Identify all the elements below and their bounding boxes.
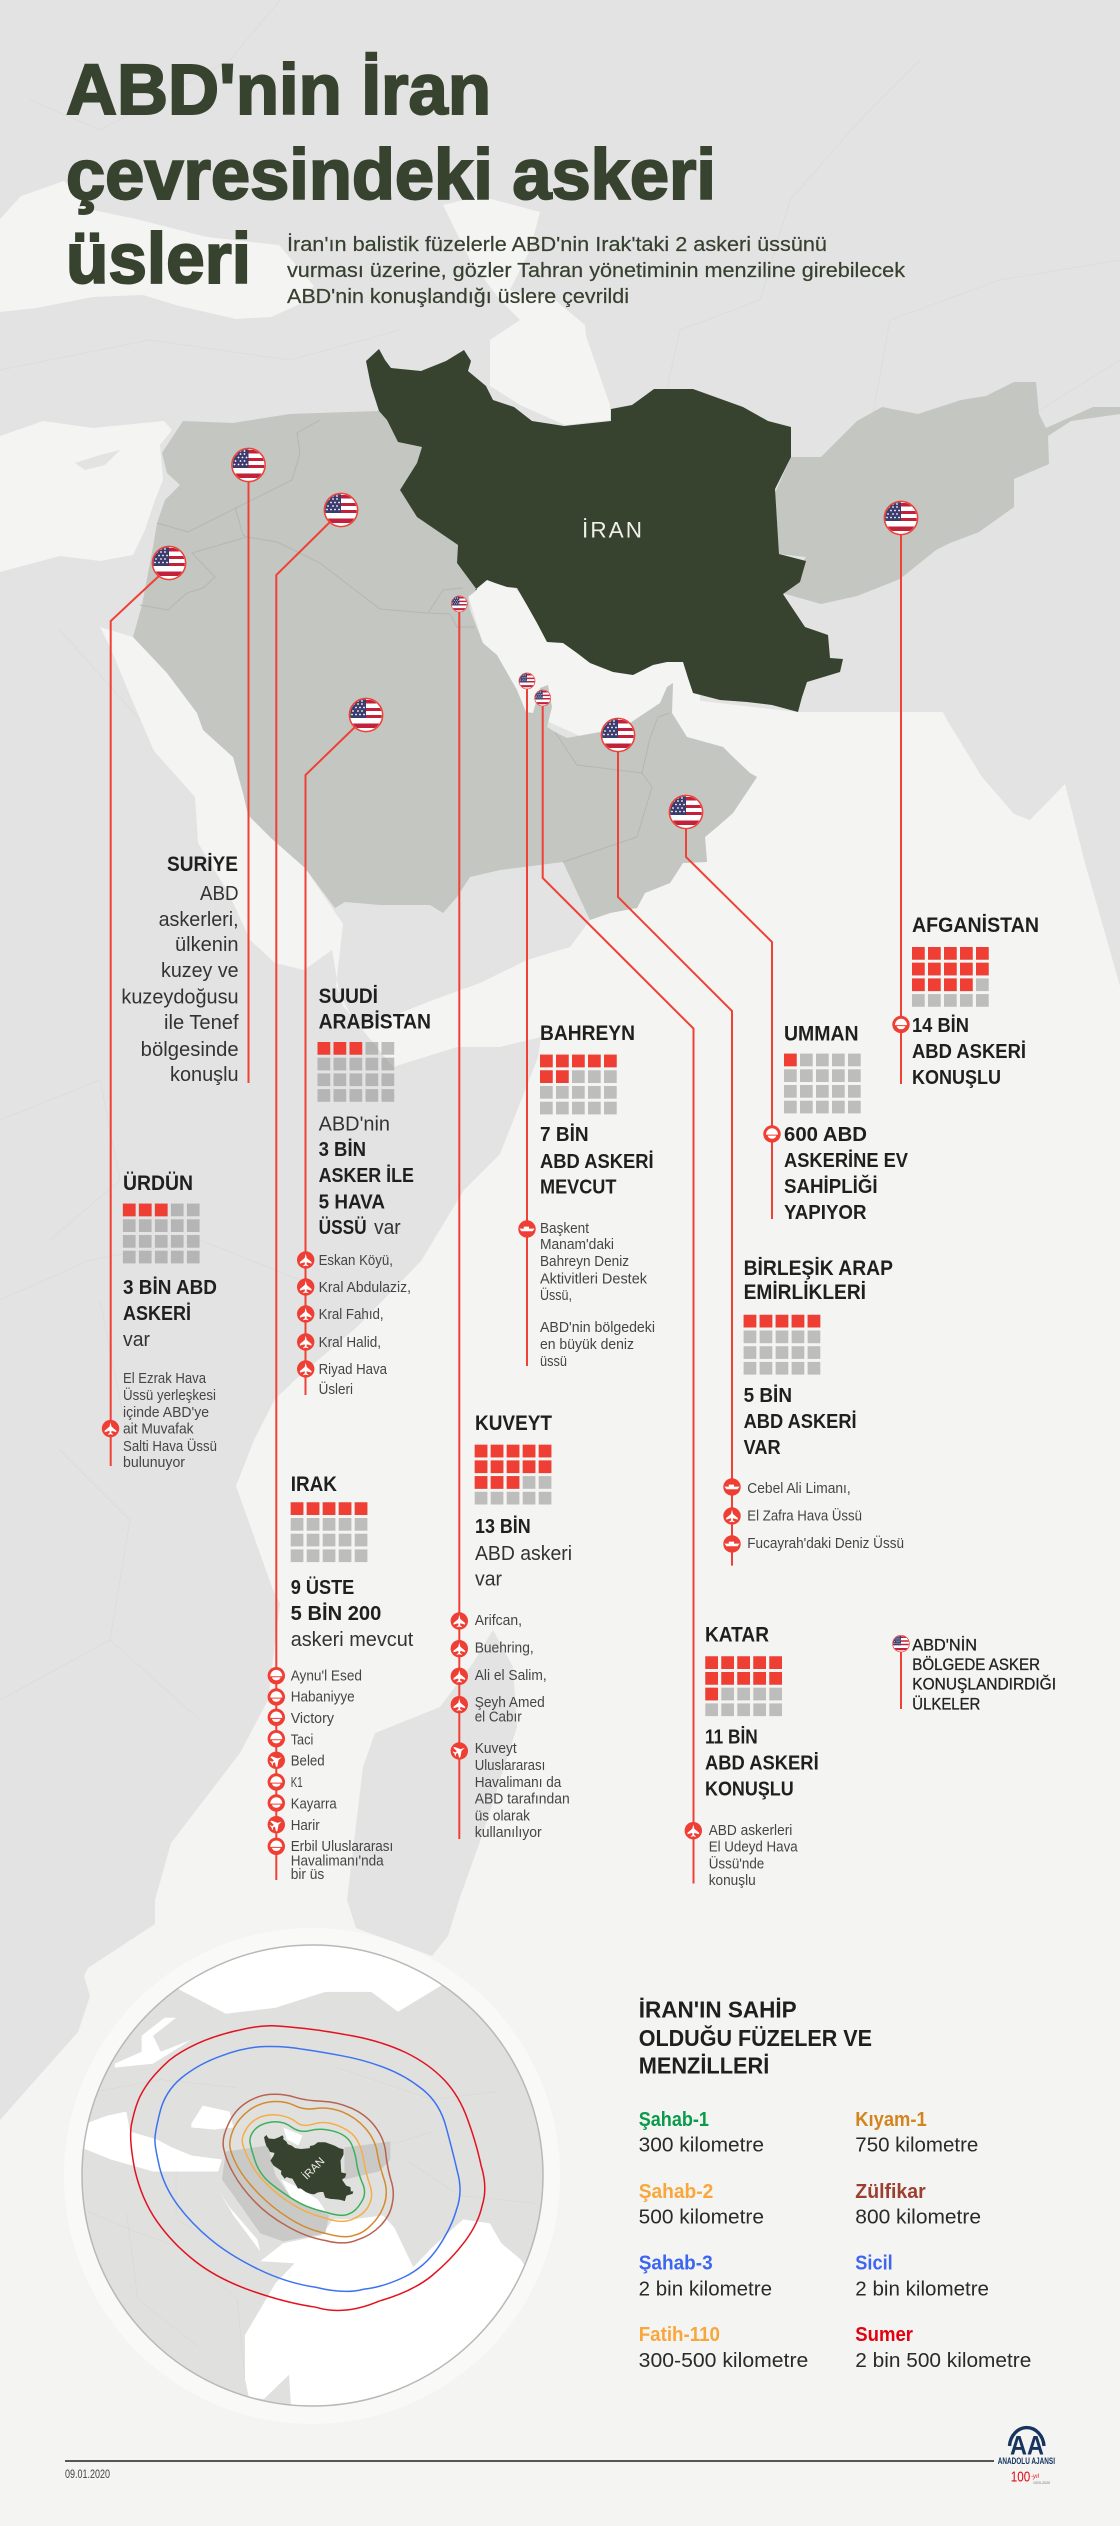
panel: Irak: 5 BİN 200 [291,1602,381,1625]
panel: Bahreyn: 7 BİN [540,1123,589,1146]
panel: Ürdün: El Ezrak Hava [123,1371,207,1387]
panel: Birleşik Arap Emirlikleri: Cebel Ali Limanı, [747,1481,851,1497]
panel: missiles and ranges: 2 bin kilometre [639,2278,772,2300]
globe: missile ranges [81,1942,544,2407]
panel: Birleşik Arap Emirlikleri: EMİRLİKLERİ [744,1281,866,1304]
panel: Suudi Arabistan: ÜSSÜ [319,1216,367,1239]
troop grid: Ürdün [123,1204,200,1263]
panel: missiles and ranges: Sicil [855,2253,893,2275]
panel: Katar: Üssü'nde [709,1854,764,1872]
panel: Birleşik Arap Emirlikleri: Fucayrah'daki Deniz Üssü [747,1534,904,1552]
logo: Anadolu Ajansı: ANADOLU AJANSI [998,2456,1055,2467]
panel: missiles and ranges: Fatih-110 [639,2324,720,2346]
panel: Bahreyn: Aktivitleri Destek [540,1272,648,1288]
panel: Ürdün: 3 BİN ABD [123,1276,217,1299]
panel: Kuveyt: Ali el Salim, [475,1668,547,1684]
panel: Irak: K1 [291,1775,303,1791]
troop grid: BAE [744,1315,820,1375]
panel: missiles and ranges: 750 kilometre [855,2135,978,2157]
panel: Afganistan: AFGANİSTAN [912,914,1039,937]
panel: Suriye: ABD [200,883,239,905]
panel: Katar: ABD ASKERİ [705,1751,819,1774]
panel: Katar: konuşlu [709,1873,756,1889]
panel: Irak: 9 ÜSTE [291,1576,354,1599]
panel: Kuveyt: Kuveyt [475,1741,517,1757]
panel: Birleşik Arap Emirlikleri: VAR [744,1437,781,1459]
panel: Afganistan: KONUŞLU [912,1067,1001,1089]
panel: Birleşik Arap Emirlikleri: 5 BİN [744,1384,792,1407]
panel: Ürdün: var [123,1329,150,1351]
panel: Suriye: kuzey ve [161,960,239,982]
panel: Ürdün: Üssü yerleşkesi [123,1386,216,1404]
panel: Bahreyn: BAHREYN [540,1022,635,1045]
panel: Bahreyn: en büyük deniz [540,1337,634,1353]
panel: Irak: Erbil Uluslararası [291,1839,393,1855]
range: Kıyam-1 [230,2101,386,2237]
panel: Suudi Arabistan: SUUDİ [319,985,378,1008]
panel: Kuveyt: üs olarak [475,1809,531,1825]
panel: Irak: Kayarra [291,1797,338,1813]
icon: ship [518,1220,536,1238]
legend: countries hosting US troops [893,1635,1056,1713]
panel: Suudi Arabistan [297,698,431,1398]
Afghanistan [775,382,1120,604]
icon: helmet [892,1016,910,1033]
panel: Kuveyt: var [475,1569,502,1591]
panel: Suudi Arabistan: ABD'nin [319,1114,390,1136]
logo: Anadolu Ajansı: 1920-2020 [1033,2481,1050,2485]
panel: Irak: Harir [291,1818,320,1834]
troop grid: Suudi Arabistan [318,1042,394,1102]
panel: Irak [268,493,414,1883]
panel: Kuveyt: Buehring, [475,1641,534,1657]
panel: Ürdün: ait Muvafak [123,1422,194,1438]
troop grid: Bahreyn [540,1055,617,1114]
icon: helmet [763,1125,781,1143]
panel: Suudi Arabistan: var [374,1217,401,1239]
panel: Suudi Arabistan: 5 HAVA [319,1192,385,1214]
globe: missile ranges: İRAN [300,2155,327,2182]
panel: Ürdün: bulunuyor [123,1455,185,1471]
panel: Ürdün: ÜRDÜN [123,1172,193,1195]
panel: Kuveyt: ABD tarafından [475,1792,570,1808]
footer: date and rule: 09.01.2020 [65,2469,110,2481]
icon: jet [685,1822,702,1839]
panel: missiles and ranges: Kıyam-1 [855,2109,927,2131]
panel: Irak: askeri mevcut [291,1629,414,1651]
Iran map: İRAN [582,518,642,542]
panel: Suudi Arabistan: Kral Abdulaziz, [319,1280,411,1296]
panel: Irak: bir üs [291,1867,324,1883]
panel: Umman: SAHİPLİĞİ [784,1174,878,1198]
troop grid: Irak [291,1502,367,1562]
range: Şahab-2 / Fatih-110 [242,2115,372,2221]
subtitle: ABD'nin konuşlandığı üslere çevrildi [287,285,629,308]
troop grid: Kuveyt [475,1445,551,1504]
panel: Bahreyn: Bahreyn Deniz [540,1254,629,1270]
title: çevresindeki askeri [66,136,716,215]
troop grid: Afganistan [912,947,989,1007]
panel: missiles and ranges [639,1996,1031,2372]
panel: Irak: Beled [291,1754,325,1770]
panel: Katar: El Udeyd Hava [709,1840,799,1856]
panel: Suriye: SURİYE [167,853,238,876]
panel: Bahreyn [518,673,655,1370]
legend: countries hosting US troops: KONUŞLANDIRDIĞI [912,1675,1056,1694]
panel: missiles and ranges: 300-500 kilometre [639,2350,808,2372]
range: Şahab-3 / Sicil [155,2046,460,2291]
panel: Katar [535,690,819,1889]
icons: Suudi bases [297,1251,314,1378]
range: Şahab-1 [250,2122,365,2215]
panel: missiles and ranges: İRAN'IN SAHİP [639,1996,797,2022]
panel: missiles and ranges: Sumer [855,2324,913,2346]
panel: Kuveyt: KUVEYT [475,1412,552,1435]
panel: missiles and ranges: 800 kilometre [855,2206,981,2228]
panel: missiles and ranges: Zülfikar [855,2181,926,2203]
panel: Birleşik Arap Emirlikleri: El Zafra Hava Üssü [747,1507,862,1525]
panel: Bahreyn: Başkent [540,1221,589,1237]
panel: Suudi Arabistan: Kral Halid, [319,1335,381,1351]
panel: Birleşik Arap Emirlikleri: BİRLEŞİK ARAP [744,1257,893,1280]
legend: countries hosting US troops: ÜLKELER [912,1695,980,1713]
troop grid: Umman [784,1054,861,1113]
panel: Ürdün: ASKERİ [123,1302,191,1325]
logo: Anadolu Ajansı: AA [1010,2431,1044,2461]
title [66,51,716,299]
title: üsleri [66,220,251,299]
range: Sumer [131,2026,485,2310]
panel: missiles and ranges: MENZİLLERİ [639,2053,769,2079]
legend: countries hosting US troops: ABD'NİN [912,1635,977,1654]
panel: missiles and ranges: 300 kilometre [639,2135,764,2157]
panel: Suriye: bölgesinde [141,1039,239,1061]
panel: Kuveyt [451,596,572,1841]
panel: Bahreyn: MEVCUT [540,1177,616,1199]
panel: Afganistan: ABD ASKERİ [912,1040,1026,1063]
panel: Bahreyn: üssü [540,1354,567,1370]
panel: Suudi Arabistan: ASKER İLE [319,1164,414,1187]
panel: Suudi Arabistan: Üsleri [319,1380,353,1398]
panel: Ürdün: içinde ABD'ye [123,1405,209,1421]
icons: BAE bases [723,1478,741,1553]
panel: Ürdün: Salti Hava Üssü [123,1437,217,1455]
panel: Suudi Arabistan: Riyad Hava [319,1362,388,1378]
panel: Bahreyn: Manam'daki [540,1237,614,1253]
title: ABD'nin İran [66,51,491,130]
panel: Irak: Aynu'l Esed [291,1668,362,1684]
panel: missiles and ranges: OLDUĞU FÜZELER VE [639,2024,872,2051]
panel: Suudi Arabistan: Kral Fahıd, [319,1307,384,1323]
panel: Katar: 11 BİN [705,1725,758,1748]
panel: Suriye [121,448,265,1086]
panel: Kuveyt: Havalimanı da [475,1775,562,1791]
panel: Suriye: kuzeydoğusu [121,986,239,1008]
panel: Bahreyn: ABD'nin bölgedeki [540,1320,655,1336]
panel: Irak: Taci [291,1732,313,1748]
panel: Irak: IRAK [291,1473,337,1496]
highlighted countries: Arabian peninsula, Syria, Iraq [133,411,757,920]
Iran map [366,349,843,712]
panel: Kuveyt: Arifcan, [475,1613,522,1629]
logo: Anadolu Ajansı: -yıl [1031,2474,1040,2480]
icon: jet [102,1420,119,1437]
subtitle: vurması üzerine, gözler Tahran yönetiminin menziline girebilecek [287,259,906,282]
panel: Katar: ABD askerleri [709,1823,792,1839]
panel: Kuveyt: Şeyh Amed [475,1695,545,1711]
panel: Kuveyt: kullanılıyor [475,1825,542,1841]
panel: Irak: Habaniyye [291,1690,355,1706]
panel: Umman [669,795,909,1224]
legend: countries hosting US troops: BÖLGEDE ASKER [912,1656,1040,1674]
panel: Suriye: askerleri, [159,909,239,931]
panel: Umman: ASKERİNE EV [784,1149,909,1172]
panel: Katar: KATAR [705,1624,769,1647]
panel: Kuveyt: 13 BİN [475,1515,531,1538]
panel: Birleşik Arap Emirlikleri [601,718,904,1566]
panel: Suriye: ülkenin [175,934,239,956]
panel: Suriye: konuşlu [170,1064,239,1086]
panel: Kuveyt: Uluslararası [475,1758,545,1774]
troop grid: Katar [705,1656,782,1716]
subtitle [287,233,906,308]
panel: Umman: 600 ABD [784,1124,867,1146]
panel: missiles and ranges: 2 bin 500 kilometre [855,2350,1031,2372]
panel: Suriye: ile Tenef [164,1012,239,1034]
range: Zülfikar [223,2094,393,2243]
panel: missiles and ranges: Şahab-1 [639,2109,709,2131]
panel: missiles and ranges: 500 kilometre [639,2206,764,2228]
panel: Kuveyt: ABD askeri [475,1543,572,1565]
panel: missiles and ranges: Şahab-3 [639,2253,713,2275]
panel: missiles and ranges: Şahab-2 [639,2181,713,2203]
panel: Afganistan [884,501,1039,1089]
logo: Anadolu Ajansı: 100 [1011,2469,1030,2486]
subtitle: İran'ın balistik füzelerle ABD'nin Irak'taki 2 askeri üssünü [287,233,827,256]
panel: Suudi Arabistan: 3 BİN [319,1138,366,1161]
icons: Kuveyt bases [451,1612,468,1760]
panel: Suudi Arabistan: Eskan Köyü, [319,1253,393,1269]
panel: Irak: Havalimanı'nda [291,1853,385,1869]
logo: Anadolu Ajansı [998,2428,1055,2486]
panel: missiles and ranges: 2 bin kilometre [855,2278,989,2300]
panel: Bahreyn: Üssü, [540,1286,572,1304]
icons: Irak bases [268,1667,285,1855]
panel: Afganistan: 14 BİN [912,1014,969,1037]
panel: Birleşik Arap Emirlikleri: ABD ASKERİ [744,1410,857,1433]
panel: Katar: KONUŞLU [705,1778,794,1800]
panel: Irak: Victory [291,1711,335,1727]
panel: Suudi Arabistan: ARABİSTAN [319,1011,431,1034]
panel: Umman: UMMAN [784,1023,859,1046]
panel: Umman: YAPIYOR [784,1202,867,1224]
panel: Ürdün [102,546,217,1471]
panel: Kuveyt: el Cabır [475,1710,522,1726]
panel: Bahreyn: ABD ASKERİ [540,1150,654,1173]
